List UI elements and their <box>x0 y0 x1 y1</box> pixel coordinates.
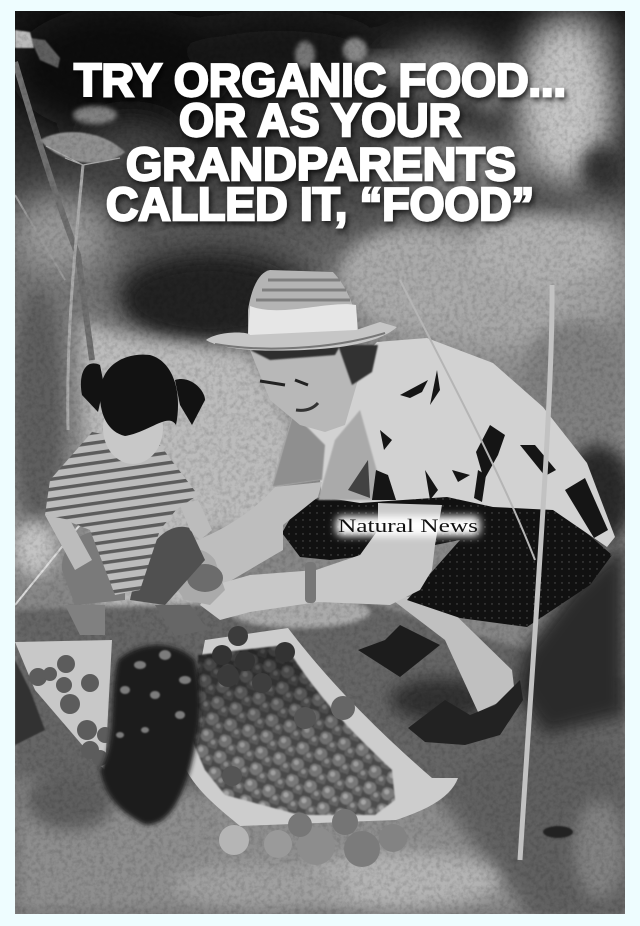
grandmother <box>170 270 615 745</box>
child's face <box>103 418 163 464</box>
garden path <box>80 320 295 610</box>
dark stone in trench <box>543 826 573 838</box>
background foliage <box>10 2 640 545</box>
title: OR AS YOUR <box>179 94 461 146</box>
face <box>250 345 378 432</box>
title: GRANDPARENTS <box>126 138 516 190</box>
fruit pile <box>192 645 395 815</box>
icon: umbel flower <box>40 132 125 165</box>
small dark plant left edge <box>15 660 45 745</box>
child's arms <box>45 500 212 570</box>
fruit: loose left group <box>29 655 113 766</box>
floral blouse <box>272 338 615 547</box>
straw hat <box>206 270 397 351</box>
cloth with fruit <box>15 626 458 867</box>
child's legs and sandals <box>62 527 208 636</box>
title <box>74 54 566 230</box>
title: TRY ORGANIC FOOD... <box>74 54 566 106</box>
watermark: Natural News: Natural News <box>338 516 478 537</box>
thin foreground stems <box>400 280 552 860</box>
child <box>45 355 212 636</box>
title: CALLED IT, “FOOD” <box>106 178 534 230</box>
fruit: large front row <box>212 626 407 867</box>
bracelet <box>305 562 316 603</box>
striped shirt <box>45 432 198 595</box>
arms and hands <box>170 482 442 620</box>
dark polka-dot trousers <box>282 495 612 627</box>
dark leafy plant <box>100 645 200 825</box>
shins and feet <box>358 595 523 745</box>
hair and pigtails <box>81 355 205 436</box>
left plants <box>10 30 125 605</box>
right foreground bush <box>515 540 625 735</box>
